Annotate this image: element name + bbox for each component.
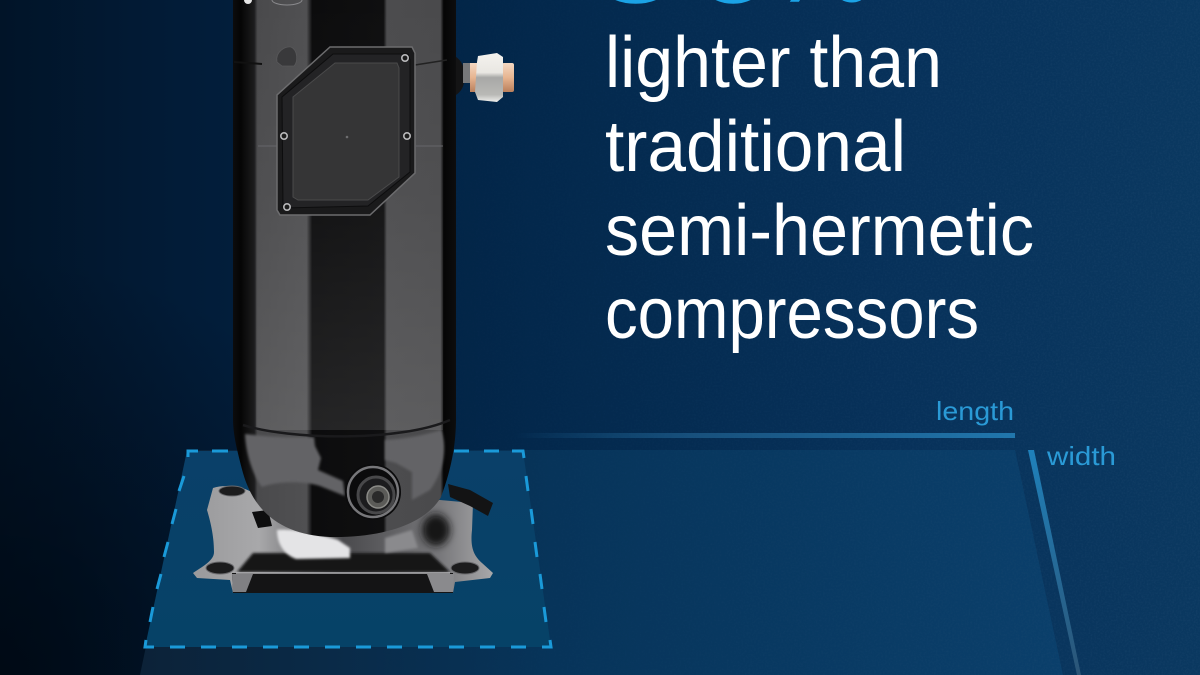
length label: length xyxy=(936,396,1014,426)
side fitting: copper tube and nut xyxy=(447,53,514,102)
top details: seam and fittings xyxy=(234,0,447,146)
percentage figure, cropped at top edge xyxy=(589,0,875,39)
mounting bolts xyxy=(206,486,479,574)
electrical cover panel xyxy=(277,47,415,215)
background texture xyxy=(1140,20,1184,604)
shell vertical brightening xyxy=(256,0,443,430)
headline text: traditional xyxy=(605,107,906,187)
width label: width xyxy=(1046,441,1116,471)
headline text xyxy=(605,23,1034,354)
headline text: lighter than xyxy=(605,23,942,103)
base plate xyxy=(193,486,493,593)
floor plane: traditional compressor footprint xyxy=(140,450,1063,675)
panel screws xyxy=(281,55,410,210)
length dimension line xyxy=(515,433,1015,438)
headline text: compressors xyxy=(605,274,979,354)
lower dome reflections xyxy=(243,420,450,500)
width dimension line xyxy=(1028,450,1081,675)
footprint square: dashed outline xyxy=(145,451,551,647)
cylindrical shell xyxy=(233,0,456,537)
sight glass port xyxy=(345,464,401,520)
compressor product illustration xyxy=(193,0,514,593)
small side connector xyxy=(448,484,493,516)
headline text: semi-hermetic xyxy=(605,191,1034,271)
